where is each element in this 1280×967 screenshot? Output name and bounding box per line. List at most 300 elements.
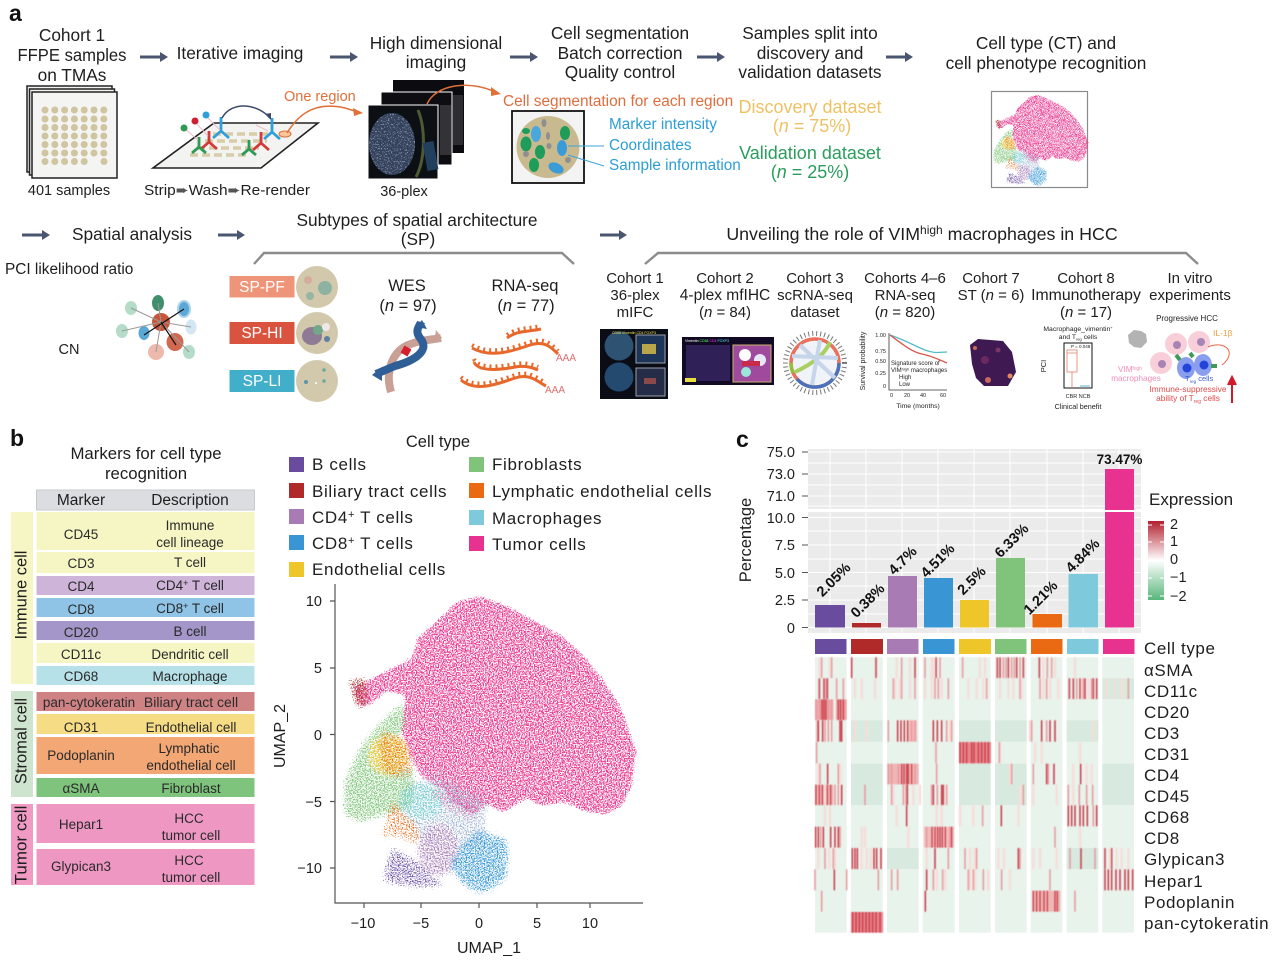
row Podoplanin: Podoplanin <box>47 748 115 763</box>
row CD11c: CD11c <box>61 647 101 662</box>
label: Cohort 3: dataset <box>790 304 840 321</box>
illustration: progressive HCC mechanism: macrophages <box>1111 374 1161 383</box>
arrow <box>330 52 358 62</box>
legend: Expression <box>1148 490 1233 605</box>
step: Iterative imaging: Iterative imaging <box>177 43 303 63</box>
heatmap row labels: CD20 <box>1144 703 1190 722</box>
scatter points <box>338 594 639 899</box>
row CD11c: Dendritic cell <box>151 647 229 662</box>
row CD11c <box>819 678 1128 699</box>
x tick labels: 5 <box>533 916 541 932</box>
heatmap row labels <box>1144 639 1269 933</box>
row CD45: CD45 <box>64 527 98 542</box>
panel label b: b <box>10 425 24 451</box>
row alphaSMA: Fibroblast <box>161 781 221 796</box>
x tick labels: −10 <box>351 916 375 932</box>
row CD8 <box>36 598 254 617</box>
heatmap background columns <box>815 657 1134 933</box>
chart: survival curve: 1.00 <box>875 333 886 339</box>
label: In vitro: In vitro <box>1167 270 1213 287</box>
step: segmentation and QC <box>551 23 689 82</box>
row Hepar1: tumor cell <box>162 828 220 843</box>
row pan-cytokeratin <box>36 692 254 711</box>
heatmap row labels: Glypican3 <box>1144 850 1225 869</box>
legend: cell type: T cells <box>355 534 413 553</box>
tag: SP-PF <box>230 276 294 298</box>
chart: survival curve <box>860 331 947 410</box>
group: Tumor cell: Tumor cell <box>12 806 30 884</box>
chart: immunotherapy boxplot: + <box>1110 325 1113 330</box>
illustration: progressive HCC mechanism: high <box>1133 366 1142 372</box>
chart: immunotherapy boxplot: P = 0.048 <box>1071 344 1091 349</box>
label: PCI likelihood ratio: PCI likelihood ratio <box>5 261 133 278</box>
panel a: workflow <box>5 0 1236 411</box>
illustration: progressive HCC mechanism: VIM <box>1118 365 1133 374</box>
chart: survival curve: VIM <box>891 368 902 374</box>
row CD45 <box>36 512 254 550</box>
chart: survival curve: 20 <box>904 393 910 399</box>
step: segmentation and QC: Cell segmentation <box>551 23 689 43</box>
label: Cohorts 4-6 <box>864 270 946 321</box>
labels: segmentation outputs: Marker intensity <box>609 116 717 133</box>
image: mIFC: CD68 Vimentin CD4 FOXP3 <box>612 331 656 335</box>
heading: VIM high macrophages: macrophages in HCC <box>943 224 1118 244</box>
step: samples split: Samples split into <box>742 23 878 43</box>
label: Cohorts 4-6: Cohorts 4–6 <box>864 270 946 287</box>
step: samples split: validation datasets <box>738 62 882 82</box>
step: High dimensional imaging <box>370 33 502 72</box>
chart: survival curve: 40 <box>920 393 926 399</box>
cell type colour strip <box>815 639 1134 654</box>
row CD4: CD4 <box>156 578 183 593</box>
x tick labels: 0 <box>475 916 483 932</box>
x tick labels <box>351 916 598 932</box>
caption: 401 samples: 401 samples <box>28 183 110 199</box>
legend: Expression: 0 <box>1170 552 1178 568</box>
illustration: progressive HCC mechanism: cells <box>1196 374 1213 383</box>
chart: chord diagram <box>786 334 844 392</box>
tag: SP-PF: SP-PF <box>239 279 285 296</box>
caption: One region: One region <box>284 89 356 105</box>
bar value labels: 4.51% <box>918 541 958 581</box>
bar value labels <box>814 452 1142 621</box>
x tick labels: −5 <box>413 916 429 932</box>
heading: Spatial analysis: Spatial analysis <box>72 224 192 244</box>
label: Cohort 8: Cohort 8 <box>1057 270 1115 287</box>
image: mIFC <box>600 329 668 399</box>
image: spatial transcriptomics blob <box>970 339 1016 386</box>
row CD68 <box>825 805 1097 826</box>
row CD8: T cell <box>188 601 224 616</box>
illustration: progressive HCC mechanism <box>1111 314 1236 405</box>
bracket <box>645 253 1198 264</box>
label: Cohort 7 <box>958 270 1024 304</box>
bracket <box>254 253 574 264</box>
legend: cell type: Tumor cells <box>492 535 586 554</box>
row pan-cytokeratin: pan-cytokeratin <box>43 695 135 710</box>
label: WES: WES <box>388 277 426 295</box>
legend: cell type: Macrophages <box>492 509 602 528</box>
thumbnail: cell type UMAP <box>992 92 1089 188</box>
row pan-cytokeratin <box>851 912 883 933</box>
axes <box>330 584 643 908</box>
chart: immunotherapy boxplot <box>1039 325 1113 411</box>
chart: survival curve: Survival probability <box>860 331 867 390</box>
row CD68 <box>36 666 254 685</box>
step: cell type recognition: Cell type (CT) and <box>976 33 1116 53</box>
legend: Expression: −2 <box>1170 589 1187 605</box>
caption: cell segmentation: Cell segmentation for each region <box>503 93 733 110</box>
row CD20: B cell <box>173 624 207 639</box>
heatmap row labels: CD4 <box>1144 766 1180 785</box>
step: cell type recognition <box>946 33 1146 73</box>
label: Cohort 3: Cohort 3 <box>786 270 844 287</box>
arrow <box>22 230 50 240</box>
chart: survival curve: Time (months) <box>896 403 940 410</box>
tag: SP-HI: SP-HI <box>241 325 283 342</box>
legend: cell type: + <box>348 509 355 521</box>
arrow <box>218 230 245 240</box>
row CD68: CD68 <box>64 669 98 684</box>
bar value labels: 2.05% <box>814 560 854 600</box>
label: Cohort 8: Immunotherapy <box>1031 287 1141 304</box>
chart: immunotherapy boxplot: and T <box>1059 334 1076 341</box>
label: Cohort 8: (n = 17) <box>1060 304 1112 321</box>
image: mfIHC: Vimentin CD68 CD4 FOXP3 <box>685 339 729 343</box>
heatmap stripes <box>815 657 1133 933</box>
step: Cohort 1 FFPE samples <box>18 25 127 85</box>
y axis ticks and labels: 5.0 <box>775 566 795 582</box>
heatmap <box>815 657 1134 933</box>
arrow <box>886 52 913 62</box>
icon: cell network <box>116 295 196 360</box>
legend: cell type: Endothelial cells <box>312 560 446 579</box>
table title: Markers for cell type <box>70 444 222 463</box>
chart: immunotherapy boxplot: cells <box>1082 334 1098 341</box>
y tick labels: 5 <box>314 661 322 677</box>
label: Cohort 2: Cohort 2 <box>696 270 754 287</box>
plot background <box>808 449 1141 633</box>
step: samples split <box>738 23 882 82</box>
row Podoplanin <box>822 891 1075 912</box>
y axis ticks and labels: 10.0 <box>767 511 795 527</box>
chart: survival curve: High <box>899 375 911 381</box>
row Glypican3 <box>36 849 254 885</box>
row Glypican3: Glypican3 <box>51 859 111 874</box>
heatmap row labels: αSMA <box>1144 661 1193 680</box>
group: Immune cell <box>11 512 33 684</box>
bar value labels: 73.47% <box>1097 452 1142 467</box>
row Podoplanin <box>36 737 254 774</box>
legend: Expression: Expression <box>1149 490 1233 509</box>
chart: immunotherapy boxplot: reg <box>1076 336 1082 342</box>
row alphaSMA: αSMA <box>62 781 100 796</box>
step: Cohort 1 FFPE samples: on TMAs <box>38 65 107 85</box>
chart: immunotherapy boxplot: CBR NCB <box>1066 394 1091 400</box>
icon: TMA slide stack <box>27 86 117 178</box>
row Glypican3: tumor cell <box>162 870 220 885</box>
chart: immunotherapy boxplot: Macrophage_vimentin <box>1043 326 1110 333</box>
label: WES: (n = 97) <box>379 297 437 315</box>
row CD20 <box>815 699 847 720</box>
label: discovery dataset: (n = 75%) <box>773 116 851 136</box>
heatmap row labels: CD8 <box>1144 829 1180 848</box>
arrow <box>600 230 627 240</box>
row CD4 <box>36 576 254 595</box>
label: RNA-seq: (n = 77) <box>497 297 555 315</box>
tissue: SP-PF <box>296 266 338 308</box>
table title <box>70 444 222 483</box>
row pan-cytokeratin: Biliary tract cell <box>144 694 238 710</box>
row CD8 <box>816 827 1080 848</box>
label: Cohort 1: Cohort 1 <box>606 270 664 287</box>
row alphaSMA <box>36 778 254 797</box>
legend: cell type: B cells <box>312 455 367 474</box>
illustration: progressive HCC mechanism: reg <box>1190 379 1197 384</box>
illustration: progressive HCC mechanism: Immune-suppressive <box>1149 384 1227 394</box>
caption: 36-plex: 36-plex <box>380 184 429 200</box>
table header <box>36 490 254 510</box>
labels: segmentation outputs <box>609 116 741 174</box>
row CD3 <box>36 552 254 573</box>
chart: survival curve: Signature score of <box>891 361 940 367</box>
row CD3 <box>817 720 1093 742</box>
step: High dimensional imaging: High dimensional <box>370 33 502 53</box>
label: Cohort 3: scRNA-seq <box>777 287 853 304</box>
row CD3: T cell <box>174 555 206 570</box>
row CD8: CD8 <box>67 602 95 617</box>
chart: UMAP scatter <box>272 584 643 957</box>
chart: survival curve: 0.75 <box>875 349 886 355</box>
chart: survival curve: 60 <box>940 393 946 399</box>
legend: cell type <box>289 433 712 579</box>
label: Cohort 3 <box>777 270 853 321</box>
illustration: progressive HCC mechanism: Progressive HCC <box>1156 314 1218 323</box>
y tick labels <box>297 594 322 877</box>
icon: DNA helix <box>372 320 442 392</box>
illustration: progressive HCC mechanism: T <box>1185 374 1190 383</box>
y axis ticks and labels: 73.0 <box>767 467 795 483</box>
label: Cohort 7: ST (n = 6) <box>958 287 1024 304</box>
illustration: iterative imaging slide <box>153 106 363 168</box>
chart: survival curve: 0 <box>883 384 886 390</box>
heatmap darker background cells <box>851 678 1134 869</box>
label: validation dataset <box>739 143 881 182</box>
heatmap row labels: CD68 <box>1144 808 1190 827</box>
tissue: SP-LI <box>296 360 338 402</box>
legend: Expression: 1 <box>1170 534 1178 550</box>
legend: cell type: Fibroblasts <box>492 455 582 474</box>
chart: survival curve: 0.25 <box>875 371 886 377</box>
row CD45 <box>815 785 1093 805</box>
heading: subtypes of SP: (SP) <box>401 229 435 249</box>
step: High dimensional imaging: imaging <box>406 52 466 72</box>
axis title UMAP_2: UMAP_2 <box>272 704 289 768</box>
illustration: 36-plex image stack <box>368 80 501 179</box>
heading: VIM high macrophages: Unveiling the role of VIM <box>726 224 920 244</box>
label: Cohort 1 <box>606 270 664 321</box>
tissue: SP-HI <box>296 312 338 354</box>
label: validation dataset: (n = 25%) <box>771 162 849 182</box>
axis title Percentage: Percentage <box>737 498 755 582</box>
row CD31: Endothelial cell <box>146 720 236 735</box>
legend: cell type: CD8 <box>312 534 348 553</box>
label: Cohort 1: 36-plex <box>610 287 660 304</box>
caption: Strip Wash Re-render: Strip➨Wash➨Re-render <box>144 183 310 199</box>
axis title UMAP_1: UMAP_1 <box>457 940 521 957</box>
label: RNA-seq <box>492 277 558 315</box>
illustration: progressive HCC mechanism: reg <box>1194 399 1201 405</box>
label: discovery dataset: Discovery dataset <box>738 97 882 117</box>
y axis ticks and labels: 0 <box>787 621 795 637</box>
chart: immunotherapy boxplot: Clinical benefit <box>1055 402 1101 411</box>
legend: Expression: 2 <box>1170 517 1178 533</box>
y tick labels: 10 <box>306 594 322 610</box>
row aSMA <box>820 657 1075 678</box>
row Glypican3: HCC <box>174 853 204 868</box>
label: Cohort 2: 4-plex mfIHC <box>680 287 770 304</box>
bar value labels: 2.5% <box>955 564 990 599</box>
chart: survival curve: macrophages <box>909 368 947 374</box>
label: Cohort 2: (n = 84) <box>699 304 751 321</box>
tag: SP-LI <box>230 370 294 392</box>
chart: survival curve: high <box>902 366 909 372</box>
label: validation dataset: Validation dataset <box>739 143 881 163</box>
bar value labels: 1.21% <box>1021 578 1061 618</box>
legend: cell type: + <box>348 535 355 547</box>
bar value labels: 6.33% <box>992 521 1032 561</box>
label: discovery dataset <box>738 97 882 136</box>
heading: subtypes of SP <box>296 210 538 249</box>
panel label c: c <box>736 426 749 452</box>
bar chart <box>767 445 1142 637</box>
chart: survival curve: 0.50 <box>875 359 886 365</box>
arrow <box>140 52 168 62</box>
label: Cohort 7: Cohort 7 <box>962 270 1020 287</box>
row Hepar1: Hepar1 <box>59 817 103 832</box>
heatmap row labels: pan-cytokeratin <box>1144 914 1269 933</box>
bar value labels: 4.7% <box>886 544 921 579</box>
label: Cohorts 4-6: RNA-seq <box>875 287 935 304</box>
label: CN: CN <box>59 342 79 358</box>
heatmap row labels: CD3 <box>1144 724 1180 743</box>
row CD45: Immune <box>166 518 214 533</box>
row Hepar1: HCC <box>174 811 204 826</box>
chart: survival curve: Low <box>899 382 911 388</box>
row CD31 <box>36 714 254 735</box>
panel b: markers and UMAP <box>10 425 712 957</box>
row CD4: + <box>183 578 188 588</box>
label: Cohort 2 <box>680 270 770 321</box>
heatmap row labels: CD45 <box>1144 787 1190 806</box>
label: Cohort 8 <box>1031 270 1141 321</box>
heading: subtypes of SP: Subtypes of spatial architecture <box>296 210 538 230</box>
heatmap row labels: CD31 <box>1144 745 1190 764</box>
row CD4 <box>818 764 1092 784</box>
group: Immune cell: Immune cell <box>12 551 30 639</box>
heatmap row labels: Hepar1 <box>1144 872 1203 891</box>
table: markers <box>11 490 254 885</box>
image: mfIHC <box>682 337 774 385</box>
legend: Expression: −1 <box>1170 570 1187 586</box>
icon: RNA strands: AAA <box>556 353 576 364</box>
arrow <box>510 52 538 62</box>
illustration: segmented cells <box>512 111 604 183</box>
row CD68: Macrophage <box>152 669 228 684</box>
table title: recognition <box>105 464 187 483</box>
row CD8: + <box>183 601 188 611</box>
row Hepar1 <box>815 869 1133 890</box>
icon: RNA strands <box>461 326 576 396</box>
row CD45: cell lineage <box>156 535 224 550</box>
y tick labels: 0 <box>314 728 322 744</box>
y tick labels: −5 <box>305 795 322 811</box>
arrow <box>697 52 725 62</box>
heading: VIM high macrophages: high <box>920 223 943 237</box>
group: Stromal cell <box>11 691 33 797</box>
panel c: bar chart and heatmap <box>736 426 1269 933</box>
y axis ticks and labels: 75.0 <box>767 445 795 461</box>
step: samples split: discovery and <box>757 43 863 63</box>
row CD8: CD8 <box>156 601 183 616</box>
y tick labels: −10 <box>297 861 322 877</box>
label: Cohort 1: mIFC <box>617 304 653 321</box>
label: RNA-seq: RNA-seq <box>492 277 558 295</box>
row CD20 <box>36 621 254 640</box>
step: segmentation and QC: Batch correction <box>558 43 682 63</box>
step: segmentation and QC: Quality control <box>565 62 675 82</box>
y axis ticks and labels: 2.5 <box>775 593 795 609</box>
heatmap row labels: Cell type <box>1144 639 1216 658</box>
legend: cell type: Biliary tract cells <box>312 482 447 501</box>
table header: Description <box>151 492 229 509</box>
panel label a: a <box>9 0 22 26</box>
illustration: progressive HCC mechanism: IL-1β <box>1213 328 1233 338</box>
y axis ticks and labels: 71.0 <box>767 489 795 505</box>
row CD31 <box>817 742 1080 763</box>
labels: segmentation outputs: Coordinates <box>609 137 692 154</box>
legend: cell type: Lymphatic endothelial cells <box>492 482 712 501</box>
row Podoplanin: endothelial cell <box>146 758 236 773</box>
legend: cell type: T cells <box>355 508 413 527</box>
labels: segmentation outputs: Sample information <box>609 157 741 174</box>
step: cell type recognition: cell phenotype recognition <box>946 53 1146 73</box>
legend: cell type: CD4 <box>312 508 348 527</box>
chart: survival curve: 0 <box>890 393 893 399</box>
heatmap row labels: CD11c <box>1144 682 1198 701</box>
y axis ticks and labels <box>767 445 808 637</box>
heatmap row labels: Podoplanin <box>1144 893 1235 912</box>
row CD31: CD31 <box>64 720 98 735</box>
label: In vitro <box>1149 270 1231 304</box>
row CD3: CD3 <box>67 556 95 571</box>
row CD4: T cell <box>188 578 224 593</box>
row Podoplanin: Lymphatic <box>158 741 220 756</box>
bars <box>815 469 1134 628</box>
group: Stromal cell: Stromal cell <box>12 698 30 784</box>
illustration: progressive HCC mechanism: cells <box>1201 393 1220 403</box>
label: WES <box>379 277 437 315</box>
row Hepar1 <box>36 804 254 843</box>
step: Cohort 1 FFPE samples: FFPE samples <box>18 45 127 65</box>
chart: immunotherapy boxplot: PCI <box>1039 360 1048 372</box>
illustration: progressive HCC mechanism: ability of T <box>1156 393 1194 403</box>
tag: SP-LI: SP-LI <box>243 373 281 390</box>
x tick labels: 10 <box>582 916 598 932</box>
row CD11c <box>36 643 254 663</box>
row CD4: CD4 <box>67 579 95 594</box>
bar value labels: 4.84% <box>1063 536 1103 576</box>
